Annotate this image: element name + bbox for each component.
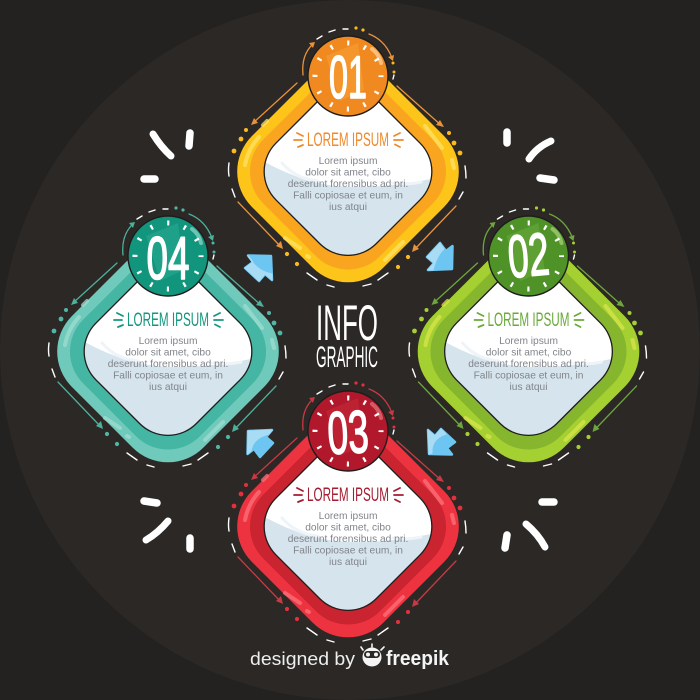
text: GRAPHIC	[316, 341, 378, 374]
arrow: top-left arc	[303, 397, 315, 430]
heading: LOREM IPSUM	[488, 310, 570, 331]
heading: LOREM IPSUM	[307, 485, 389, 506]
footer credit: freepik	[386, 648, 450, 670]
content card	[264, 102, 432, 256]
arrow: upper right edge	[578, 266, 624, 307]
body text	[288, 156, 408, 213]
arrow: lower left edge	[238, 557, 283, 604]
body text: ius atqui	[510, 382, 547, 393]
body text: Lorem ipsum	[319, 511, 377, 522]
body text: ius atqui	[329, 557, 367, 568]
content card	[84, 282, 252, 436]
decorative dots	[52, 206, 282, 449]
arrow: 01 to 02	[427, 243, 452, 270]
arrow: lower right edge	[412, 206, 456, 252]
frame band	[397, 220, 660, 483]
arrow: upper right edge	[397, 441, 444, 482]
heading: LOREM IPSUM	[127, 310, 209, 331]
body text: Lorem ipsum	[499, 336, 558, 347]
arrow: upper right edge	[217, 266, 264, 307]
arrow: lower left edge	[418, 382, 464, 429]
decorative burst: bottom right	[505, 502, 554, 548]
heading burst	[294, 488, 403, 502]
arrow: upper left edge	[251, 438, 297, 480]
number badge: 01	[329, 44, 367, 111]
body text	[108, 336, 228, 393]
panel: step 02	[408, 206, 648, 468]
body text: deserunt forensibus ad pri.	[288, 179, 408, 190]
panel: step 01	[228, 26, 467, 288]
heading burst	[474, 313, 584, 327]
arrow: top-right arc	[189, 214, 214, 241]
body text: dolor sit amet, cibo	[486, 348, 572, 358]
body text	[288, 511, 408, 568]
band highlights	[245, 121, 454, 260]
body text: dolor sit amet, cibo	[305, 168, 391, 178]
number badge	[308, 391, 388, 471]
body text: deserunt forensibus ad pri.	[288, 534, 408, 545]
number badge: 04	[146, 225, 190, 292]
body text: ius atqui	[329, 202, 367, 213]
decorative white dashes	[48, 209, 286, 467]
decorative white dashes	[228, 384, 466, 642]
decorative white dashes	[409, 209, 646, 467]
title: INFO	[316, 295, 378, 351]
arrow: lower left edge	[58, 382, 103, 429]
content card	[444, 282, 613, 436]
body text: ius atqui	[149, 382, 187, 393]
arrow: top-left arc	[123, 222, 135, 255]
arrow: 04 to 01	[245, 256, 272, 281]
decorative dots	[232, 381, 462, 624]
band highlights	[245, 476, 454, 615]
arrow: 03 to 04	[248, 430, 273, 457]
body text: Falli copiosae et eum, in	[113, 370, 223, 382]
number badge	[308, 36, 388, 116]
body text: deserunt forensibus ad pri.	[468, 359, 589, 370]
number badge: 03	[326, 398, 370, 467]
footer credit: designed by	[250, 649, 355, 669]
body text: Falli copiosae et eum, in	[293, 190, 403, 202]
decorative dots	[412, 206, 643, 449]
heading burst	[294, 133, 403, 147]
title	[316, 295, 378, 374]
band highlights	[65, 301, 274, 440]
body text: dolor sit amet, cibo	[305, 522, 391, 534]
body text	[468, 336, 589, 393]
arrow: lower left edge	[238, 202, 283, 249]
arrow: upper right edge	[397, 86, 444, 127]
heading burst	[114, 313, 223, 327]
body text: dolor sit amet, cibo	[125, 348, 211, 358]
icon: freepik mascot	[361, 644, 384, 666]
arrow: 02 to 03	[428, 429, 455, 454]
number badge	[128, 216, 208, 296]
body text: Falli copiosae et eum, in	[474, 370, 583, 382]
body text: deserunt forensibus ad pri.	[108, 359, 228, 370]
arrow: top-right arc	[369, 389, 394, 416]
body text: Falli copiosae et eum, in	[293, 546, 403, 556]
panel: step 04	[48, 206, 287, 468]
arrow: upper left edge	[432, 263, 478, 305]
frame band	[216, 40, 480, 303]
arrow: top-right arc	[550, 214, 574, 241]
arrow: lower right edge	[592, 386, 636, 432]
arrow: top-left arc	[303, 42, 315, 75]
number badge	[488, 216, 568, 296]
arrow: lower right edge	[412, 561, 456, 607]
arrow: top-left arc	[483, 222, 496, 255]
arrow: upper left edge	[251, 83, 297, 125]
frame band	[36, 220, 300, 483]
decorative white dashes	[228, 29, 466, 287]
decorative burst: top right	[507, 132, 554, 180]
footer credit	[250, 648, 450, 670]
content card	[264, 456, 432, 611]
panel: step 03	[228, 381, 467, 643]
decorative burst: top left	[144, 133, 190, 179]
band highlights	[426, 301, 634, 440]
arrow: top-right arc	[369, 34, 394, 61]
body text: Lorem ipsum	[139, 336, 197, 347]
heading: LOREM IPSUM	[307, 130, 389, 151]
arrow: upper left edge	[71, 263, 117, 305]
body text: Lorem ipsum	[319, 156, 377, 167]
decorative dots	[232, 26, 462, 269]
arrow: lower right edge	[232, 386, 276, 432]
frame band	[216, 395, 480, 658]
number badge: 02	[505, 220, 552, 291]
decorative burst: bottom left	[144, 501, 190, 549]
